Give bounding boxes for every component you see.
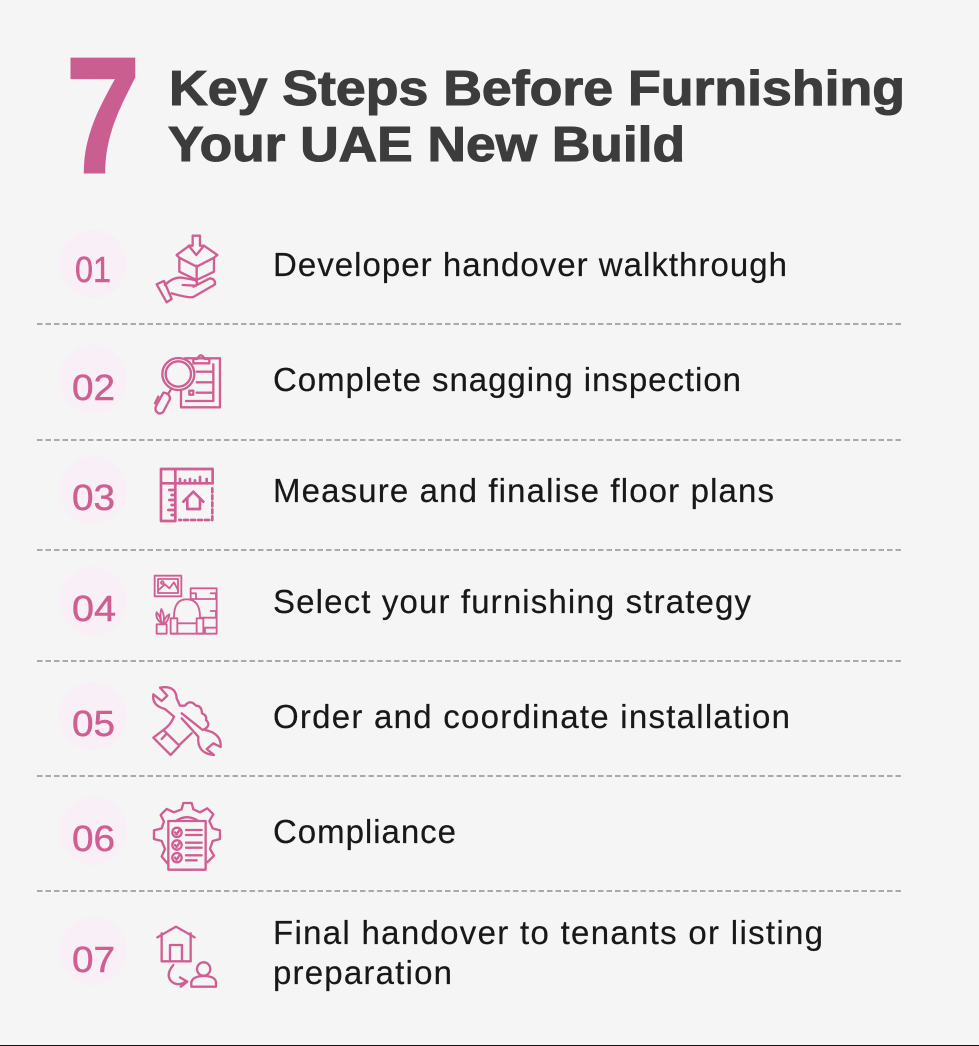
step text 07: Final handover to tenants or listing: [273, 914, 823, 951]
number badge 07: 07: [72, 939, 115, 980]
number badge 04: [59, 567, 127, 635]
icon: gear with checklist: [154, 803, 220, 870]
icon: house handed to person: [157, 927, 216, 987]
number badge 06: [59, 797, 127, 865]
number badge 07: [59, 917, 127, 985]
step 05: [59, 682, 790, 755]
number badge 02: 02: [72, 367, 115, 408]
icon: magnifier and clipboard: [155, 355, 220, 413]
number badge 01: 01: [75, 249, 111, 290]
title: Key Steps Before Furnishing: [169, 62, 905, 116]
big number 7: 7: [66, 24, 140, 207]
icon: floor plan with rulers: [161, 469, 213, 521]
number badge 02: [59, 345, 127, 413]
step text 02: Complete snagging inspection: [273, 361, 741, 398]
step 07: [59, 914, 823, 991]
step text 01: Developer handover walkthrough: [273, 246, 787, 283]
icon: hand holding wrench: [153, 687, 221, 755]
step text 05: Order and coordinate installation: [273, 698, 790, 735]
step 03: [59, 456, 774, 524]
step 06: [59, 797, 456, 870]
number badge 04: 04: [72, 588, 116, 629]
number badge 01: [59, 230, 127, 298]
number badge 05: 05: [72, 703, 115, 744]
step 02: [59, 345, 741, 413]
number badge 03: [59, 456, 127, 524]
step 04: [59, 567, 752, 635]
step text 04: Select your furnishing strategy: [273, 583, 752, 620]
number badge 06: 06: [72, 818, 115, 859]
step text 03: Measure and finalise floor plans: [273, 472, 774, 509]
number badge 03: 03: [72, 477, 115, 518]
title: [168, 62, 905, 172]
icon: box on open hand: [157, 236, 217, 302]
number badge 05: [59, 682, 127, 750]
step text 06: Compliance: [273, 813, 456, 850]
step text 07: [273, 914, 823, 991]
step text 07: preparation: [273, 954, 452, 991]
icon: furnished living room: [155, 576, 217, 634]
step 01: [59, 230, 787, 302]
title: Your UAE New Build: [168, 118, 685, 172]
